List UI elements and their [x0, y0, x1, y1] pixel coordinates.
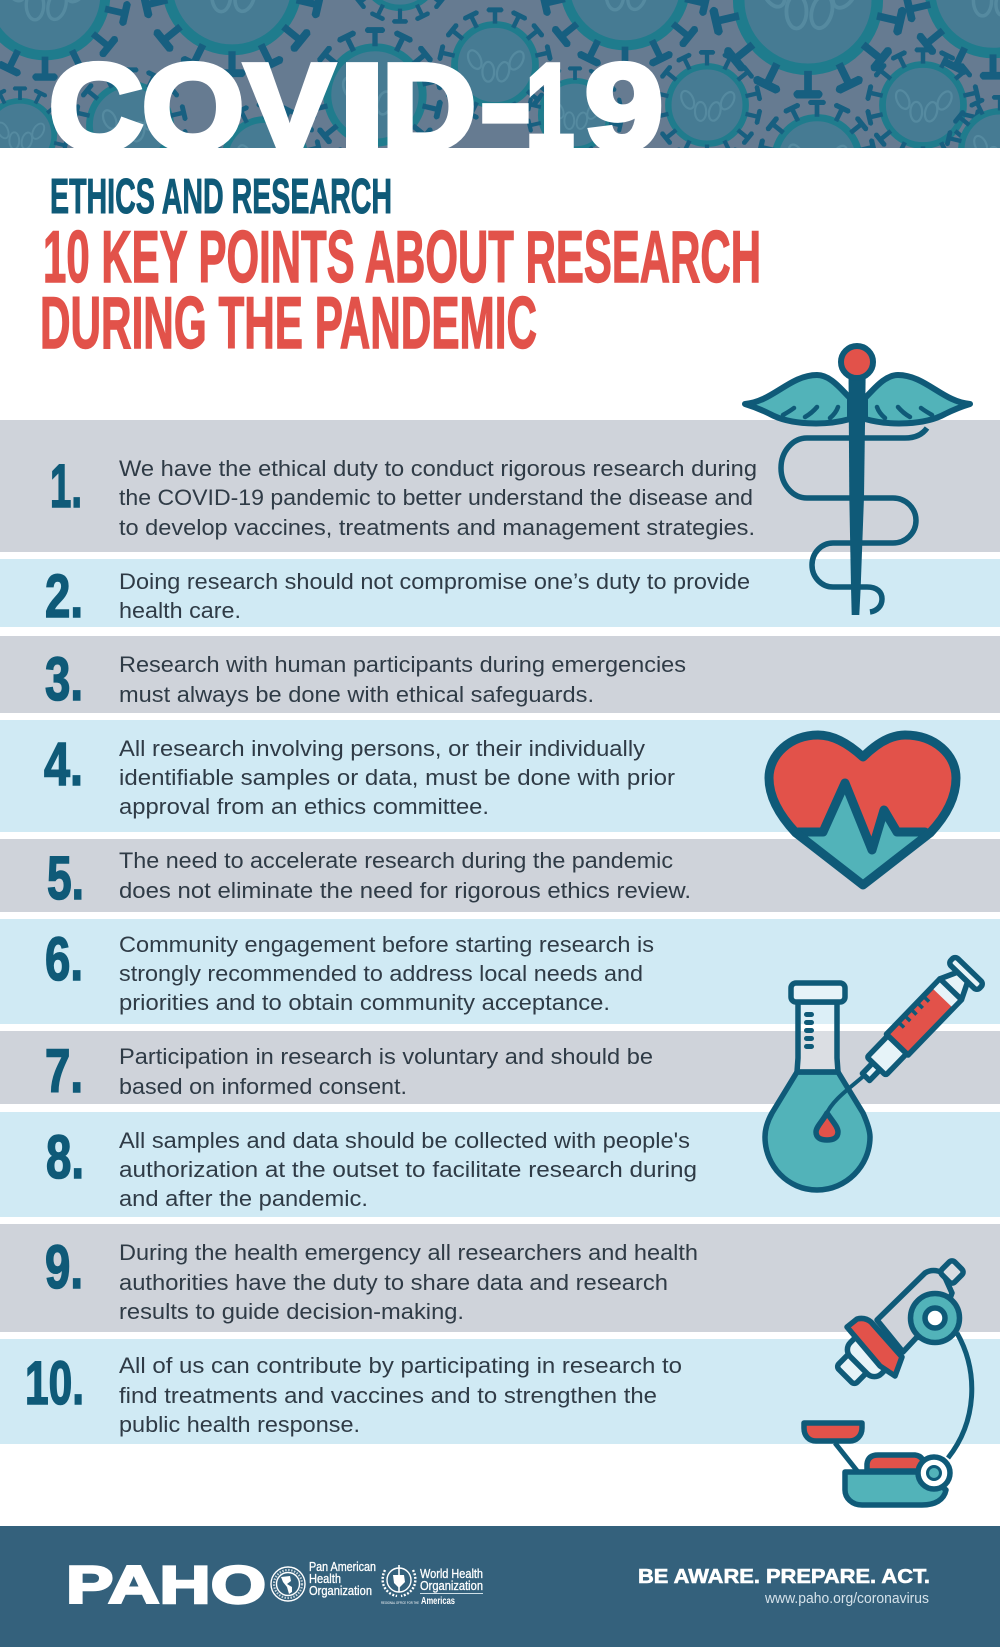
- PAHO name: Organization: [309, 1583, 372, 1598]
- website: www.paho.org/coronavirus: [764, 1591, 929, 1607]
- PAHO name: Health: [309, 1571, 341, 1586]
- point 2: 2.: [45, 562, 83, 630]
- banner with virus pattern: O: [142, 39, 244, 175]
- point 4: identifiable samples or data, must be done with prior: [119, 765, 675, 790]
- point 2: [0, 559, 1000, 630]
- banner with virus pattern: [0, 0, 1000, 148]
- point 9: authorities have the duty to share data and research: [119, 1270, 668, 1295]
- point 5: does not eliminate the need for rigorous ethics review.: [119, 878, 691, 903]
- point 1: 1.: [50, 452, 82, 520]
- point 9: [0, 1224, 1000, 1332]
- point 9: 9.: [45, 1233, 83, 1301]
- WHO name: Americas: [421, 1596, 455, 1607]
- banner with virus pattern: 1: [526, 39, 574, 175]
- icon: microscope: [804, 1259, 972, 1505]
- banner with virus pattern: I: [339, 39, 385, 175]
- point 1: the COVID-19 pandemic to better understand the disease and: [119, 485, 753, 510]
- point 6: Community engagement before starting research is: [119, 932, 654, 957]
- PAHO name: [309, 1559, 376, 1598]
- banner with virus pattern: D: [382, 39, 476, 175]
- point 2: Doing research should not compromise one’s duty to provide: [119, 569, 750, 594]
- heading: DURING THE PANDEMIC: [40, 283, 537, 364]
- banner with virus pattern: V: [245, 39, 334, 175]
- point 10: find treatments and vaccines and to strengthen the: [119, 1383, 657, 1408]
- icon: flask and syringe: [765, 956, 984, 1190]
- point 3: 3.: [45, 645, 83, 713]
- WHO name: [381, 1566, 483, 1607]
- point 6: 6.: [45, 925, 83, 993]
- point 5: 5.: [47, 844, 84, 912]
- point 6: [0, 919, 1000, 1024]
- banner with virus pattern: -: [480, 35, 531, 171]
- point 8: [0, 1112, 1000, 1217]
- point 8: 8.: [46, 1123, 84, 1191]
- point 4: approval from an ethics committee.: [119, 794, 489, 819]
- point 5: The need to accelerate research during the pandemic: [119, 848, 673, 873]
- WHO name: Organization: [420, 1578, 483, 1593]
- point 7: 7.: [45, 1037, 83, 1105]
- point 7: based on informed consent.: [119, 1074, 407, 1099]
- point 8: authorization at the outset to facilitate research during: [119, 1157, 697, 1182]
- PAHO wordmark: PAHO: [66, 1556, 266, 1615]
- point 8: and after the pandemic.: [119, 1186, 368, 1211]
- point 9: During the health emergency all researchers and health: [119, 1240, 698, 1265]
- point 1: [0, 420, 1000, 552]
- point 10: public health response.: [119, 1412, 360, 1437]
- icon: caduceus: [745, 346, 970, 615]
- point 4: 4.: [44, 730, 83, 798]
- PAHO emblem: [271, 1567, 305, 1601]
- point 4: [0, 720, 1000, 832]
- point 10: 10.: [25, 1349, 84, 1417]
- point 10: All of us can contribute by participating in research to: [119, 1353, 682, 1378]
- banner with virus pattern: C: [49, 39, 143, 175]
- WHO emblem: [383, 1565, 415, 1596]
- point 10: [0, 1339, 1000, 1444]
- point 1: We have the ethical duty to conduct rigorous research during: [119, 456, 757, 481]
- point 6: priorities and to obtain community acceptance.: [119, 990, 610, 1015]
- point 6: strongly recommended to address local needs and: [119, 961, 643, 986]
- WHO name: World Health: [420, 1566, 483, 1581]
- point 3: Research with human participants during emergencies: [119, 652, 686, 677]
- point 3: must always be done with ethical safeguards.: [119, 682, 594, 707]
- point 9: results to guide decision-making.: [119, 1299, 464, 1324]
- subtitle: ETHICS AND RESEARCH: [50, 170, 392, 224]
- point 7: Participation in research is voluntary and should be: [119, 1044, 653, 1069]
- point 2: health care.: [119, 598, 241, 623]
- banner with virus pattern: 9: [585, 39, 663, 175]
- point 1: to develop vaccines, treatments and management strategies.: [119, 515, 755, 540]
- footer: [0, 1526, 1000, 1647]
- tagline: BE AWARE. PREPARE. ACT.: [638, 1566, 930, 1588]
- icon: heart: [769, 735, 956, 885]
- PAHO name: Pan American: [309, 1559, 376, 1574]
- WHO name: REGIONAL OFFICE FOR THE: [381, 1600, 419, 1605]
- heading: [40, 217, 761, 364]
- point 8: All samples and data should be collected with people's: [119, 1128, 690, 1153]
- point 4: All research involving persons, or their individually: [119, 736, 645, 761]
- point 3: [0, 636, 1000, 713]
- point 7: [0, 1031, 1000, 1105]
- point 5: [0, 839, 1000, 912]
